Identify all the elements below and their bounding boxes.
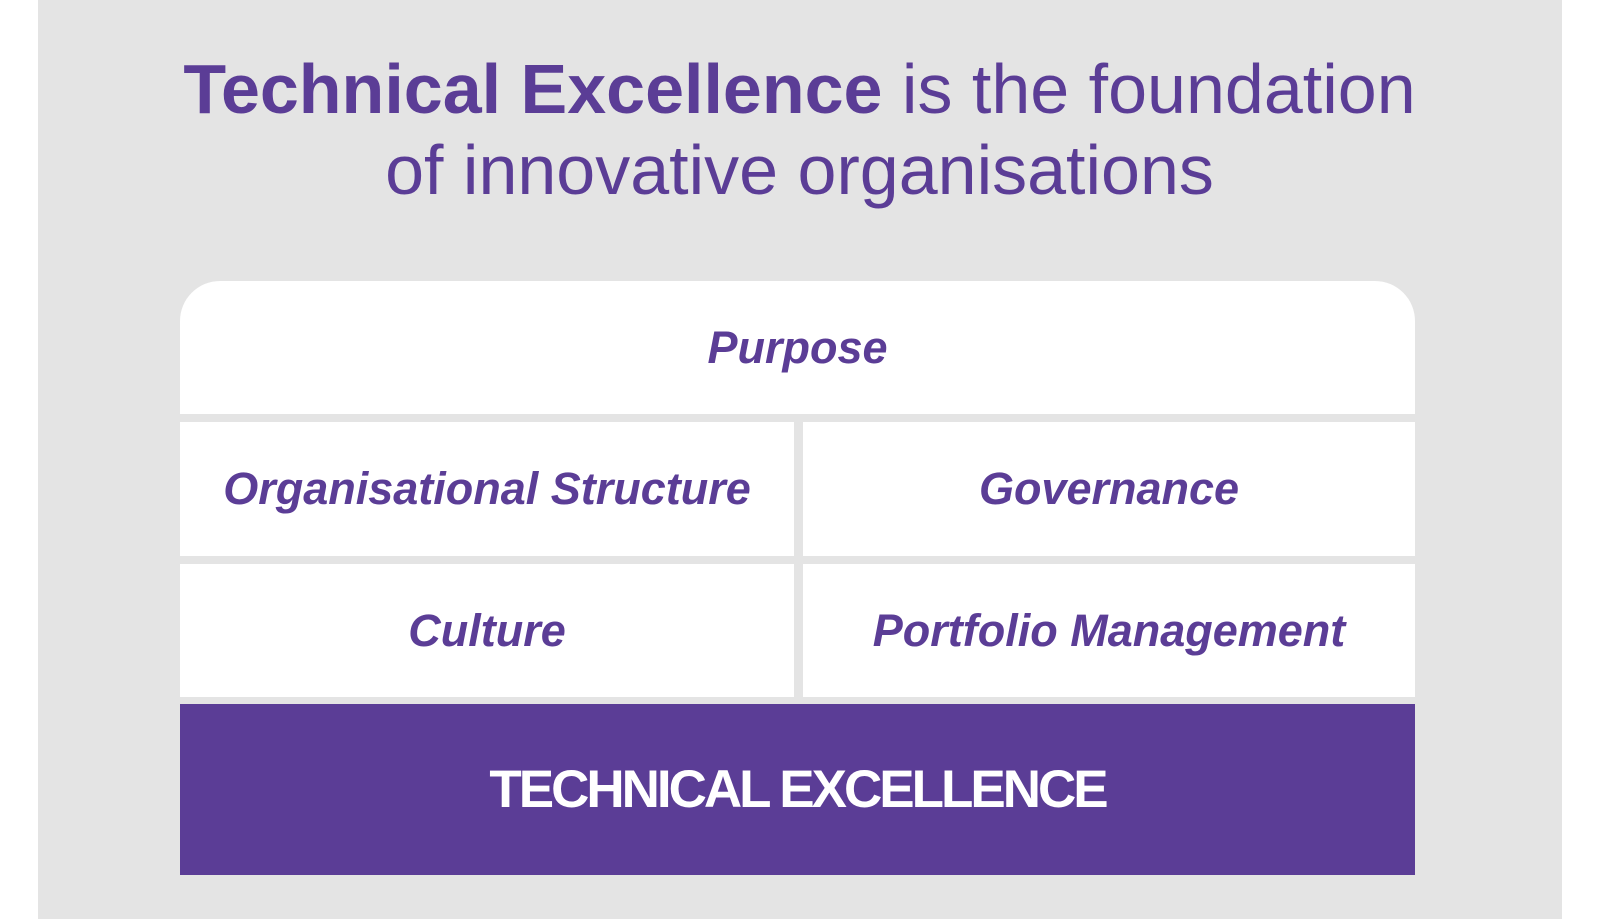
panel: portfolio management [803, 564, 1415, 697]
panel: organisational structure [180, 422, 794, 556]
panel: technical excellence foundation: TECHNICAL EXCELLENCE [489, 760, 1106, 819]
panel: portfolio management: Portfolio Management [873, 604, 1345, 656]
panel: organisational structure: Organisational Structure [223, 463, 751, 514]
title: of innovative organisations [385, 131, 1214, 209]
title [183, 50, 1416, 209]
panel: governance [803, 422, 1415, 556]
panel: purpose [180, 281, 1415, 414]
panel: technical excellence foundation [180, 704, 1415, 875]
panel: governance: Governance [979, 463, 1239, 514]
panel: purpose: Purpose [707, 322, 888, 372]
panel: culture [180, 564, 794, 697]
panel: culture: Culture [408, 604, 566, 656]
title: Technical Excellence is the foundation [183, 50, 1416, 128]
